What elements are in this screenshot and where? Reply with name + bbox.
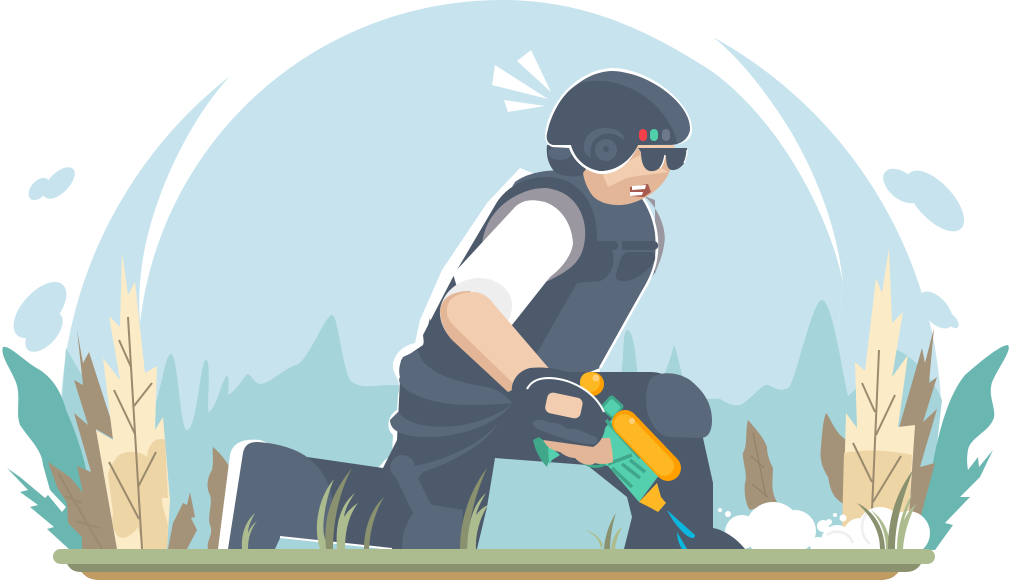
lower belt band [390,404,512,437]
gun ribs [606,420,645,487]
soil layer [80,570,900,580]
gun handle [533,436,552,467]
plant veins [853,350,901,510]
glove back [512,368,600,448]
water spray [667,510,695,549]
tan leaf [743,420,777,510]
helmet [547,71,690,171]
right plants [743,248,1009,550]
white outline [218,168,600,549]
forehead skin [638,144,674,150]
helmet buttons [639,129,647,141]
inner dome [138,0,843,552]
grey sleeve shadow [482,188,585,281]
glove front [523,378,605,447]
foam [718,502,930,558]
right outer band [713,37,941,552]
sunglasses [638,148,687,171]
shock lines [492,50,551,112]
teeth [630,185,646,196]
grass tuft right [857,503,885,549]
gun body [590,415,660,502]
belt strap and knot [390,423,498,549]
helmet shadow [547,81,677,171]
glove window [544,391,584,420]
head [545,68,692,205]
arm [440,291,552,392]
cream plant shading [842,451,912,530]
hand [523,378,613,465]
tan leaf veins [751,433,768,497]
torso base [425,170,658,420]
gun ball cap [580,372,604,396]
small tan plant [168,492,197,549]
glove highlight [527,378,604,412]
teal leaf left [2,347,95,550]
right shoulder grey strap [644,196,665,275]
grass tuft centre [585,530,603,549]
vest dark panel [423,177,614,400]
gun tank [625,423,668,468]
cream spiky plant left [96,252,170,549]
sleeve cuff [440,278,512,343]
gun nozzle [639,483,666,512]
glove knuckles [533,420,597,444]
clouds [4,161,974,359]
tan leaf [208,447,240,549]
helmet white outline [545,68,692,174]
grass [242,468,916,549]
tan spiky plant right [895,328,937,530]
arm highlight [447,292,552,388]
face highlight [603,155,668,187]
belt band [399,350,512,405]
tan blob plant [821,413,850,510]
grass strip [53,549,935,564]
fingers [543,438,613,465]
grass tuft thigh [317,479,334,549]
vest pockets [599,241,658,281]
glasses white glint [660,150,687,168]
hair highlight [548,146,572,160]
shin white line [280,537,392,549]
chest white seam [600,198,657,368]
hair [547,145,590,176]
distant hills [62,300,942,550]
cream plant shading [108,439,168,549]
white shirt sleeve [453,200,573,330]
knee pad [646,373,712,438]
grass tuft rear boot [242,513,257,549]
rear boot [228,442,333,549]
water gun [533,372,695,549]
soldier [218,168,745,549]
ground [53,549,935,580]
grass tuft knee [460,468,487,549]
ear guard [584,128,624,157]
tan spiky plant left [48,330,117,549]
mouth [630,184,651,197]
left outer band [61,76,230,552]
teal leaf right [915,345,1009,550]
left plants [2,252,240,550]
face [583,145,672,205]
plant veins [58,317,156,549]
gun grip arc [582,461,605,466]
gun valve [599,394,625,420]
dark grass layer [66,562,922,572]
lower body [280,318,745,549]
cream spiky plant right [842,248,915,530]
